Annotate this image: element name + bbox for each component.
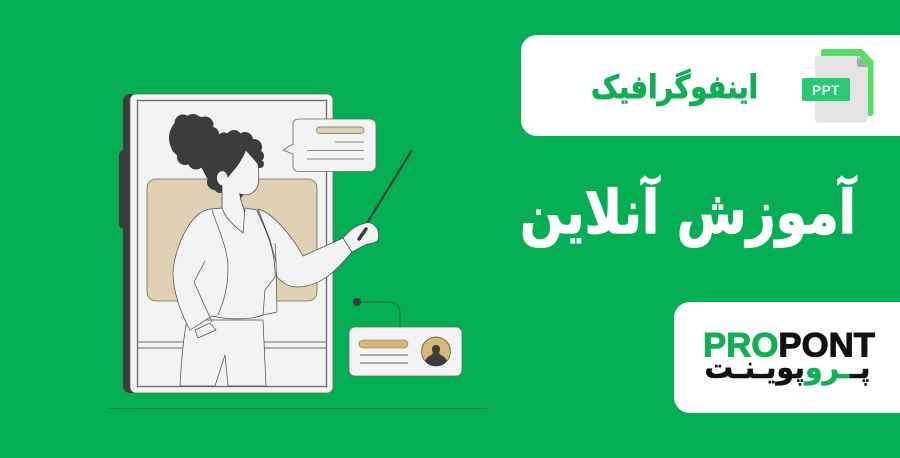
neck and face <box>217 150 259 233</box>
shelf lines <box>138 342 326 348</box>
logo card <box>674 302 900 413</box>
card tan bar <box>359 340 408 348</box>
bubble text lines <box>307 142 364 159</box>
tablet body <box>130 94 333 393</box>
illustration: tablet with presenter <box>119 94 462 393</box>
speech bubble <box>283 119 376 172</box>
hair <box>169 114 264 193</box>
pointer grip <box>359 229 366 239</box>
jacket lapels and arm lines <box>194 210 276 322</box>
beige board <box>147 179 317 301</box>
bubble beige bar <box>316 127 364 134</box>
logo wordmark persian: پــروپویـنـت <box>704 350 870 386</box>
hand <box>343 223 379 252</box>
avatar <box>422 337 450 366</box>
tablet screen frame <box>138 100 326 386</box>
card text lines <box>360 355 408 363</box>
jacket torso <box>173 208 277 330</box>
profile card <box>349 327 462 376</box>
logo wordmark latin: PROPONT <box>703 326 875 364</box>
cuff <box>195 323 216 338</box>
presenter <box>169 114 412 386</box>
connector with dot <box>353 298 400 327</box>
neck shadow <box>239 193 243 198</box>
subtitle: infographic: اینفوگرافیک <box>591 68 758 106</box>
top white card <box>521 35 900 136</box>
ground line <box>107 408 488 410</box>
icon: PPT file <box>802 49 874 122</box>
icon: PPT file: PPT <box>812 83 840 98</box>
tablet back and side button <box>119 94 153 393</box>
right sleeve <box>258 209 352 287</box>
trousers <box>180 320 266 386</box>
pointer stick <box>367 150 412 223</box>
